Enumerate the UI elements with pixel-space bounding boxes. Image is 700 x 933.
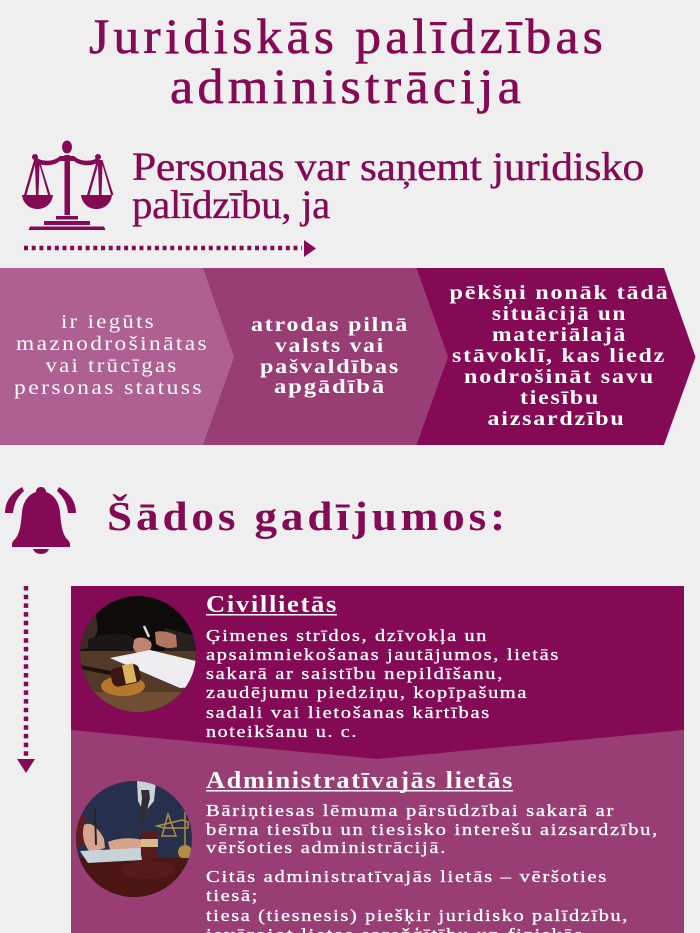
title: administrācija [170, 58, 525, 114]
case text: Bāriņtiesas lēmuma pārsūdzībai sakarā ar [206, 801, 615, 820]
case text [206, 801, 659, 933]
subheading [132, 144, 644, 227]
condition text 3: pēkšņi nonāk tādā [450, 282, 670, 305]
condition text 1: vai trūcīgas [46, 356, 178, 377]
condition text 3 [450, 282, 670, 430]
subheading: palīdzību, ja [132, 182, 331, 227]
case heading: Civillietās [206, 592, 338, 618]
heading: in these cases: Šādos gadījumos: [107, 493, 509, 539]
arrow: dotted vertical [17, 586, 35, 773]
icon: bell [5, 487, 76, 554]
panel: lower administrative background [71, 720, 684, 933]
condition text 3: situācijā un [492, 303, 627, 325]
arrow: dotted horizontal [24, 240, 316, 257]
case text: sakarā ar saistību nepildīšanu, [206, 664, 504, 683]
condition text 2: apgādībā [274, 376, 386, 398]
condition text 1: personas statuss [14, 378, 204, 399]
panel: civil cases [71, 586, 684, 759]
condition text 3: materiālajā [492, 324, 627, 346]
case text: bērna tiesību un tiesisko interešu aizsardzību, [206, 820, 659, 839]
condition text 2: pašvaldības [260, 356, 400, 378]
case text: Ģimenes strīdos, dzīvokļa un [206, 626, 488, 645]
condition text 1: maznodrošinātas [16, 334, 209, 355]
case text [206, 626, 560, 741]
condition text 2: valsts vai [275, 335, 385, 357]
condition text 3: stāvoklī, kas liedz [452, 345, 666, 367]
photo: lawyer at desk [76, 781, 192, 897]
case text: noteikšanu u. c. [206, 722, 358, 741]
photo: gavel and document [80, 596, 196, 712]
condition text 1 [14, 312, 209, 399]
condition text 3: tiesību [520, 387, 600, 409]
case text: Citās administratīvajās lietās – vēršoties [206, 867, 608, 886]
subheading: Personas var saņemt juridisko [132, 144, 644, 189]
chevron 2 [180, 268, 448, 445]
case text: vēršoties administrācijā. [206, 838, 447, 857]
condition text 2 [251, 314, 409, 398]
condition text 2: atrodas pilnā [251, 314, 409, 336]
panel: administrative cases [76, 768, 659, 933]
case text: tiesā; [206, 886, 259, 905]
panel: three conditions chevrons [0, 268, 696, 445]
condition text 3: aizsardzību [488, 408, 626, 430]
case text: tiesa (tiesnesis) piešķir juridisko palīdzību, [206, 906, 629, 925]
panel background [71, 586, 684, 759]
title [89, 8, 607, 114]
chevron 1 [0, 268, 234, 445]
case text: apsaimniekošanas jautājumos, lietās [206, 645, 560, 664]
case text: sadali vai lietošanas kārtības [206, 703, 491, 722]
case heading: Administratīvajās lietās [206, 768, 514, 794]
case text: zaudējumu piedziņu, kopīpašuma [206, 683, 528, 702]
chevron 3 [380, 268, 696, 445]
icon: scales of justice [22, 140, 114, 230]
condition text 3: nodrošināt savu [464, 366, 655, 388]
title: Juridiskās palīdzības [89, 8, 607, 64]
condition text 1: ir iegūts [61, 312, 156, 333]
